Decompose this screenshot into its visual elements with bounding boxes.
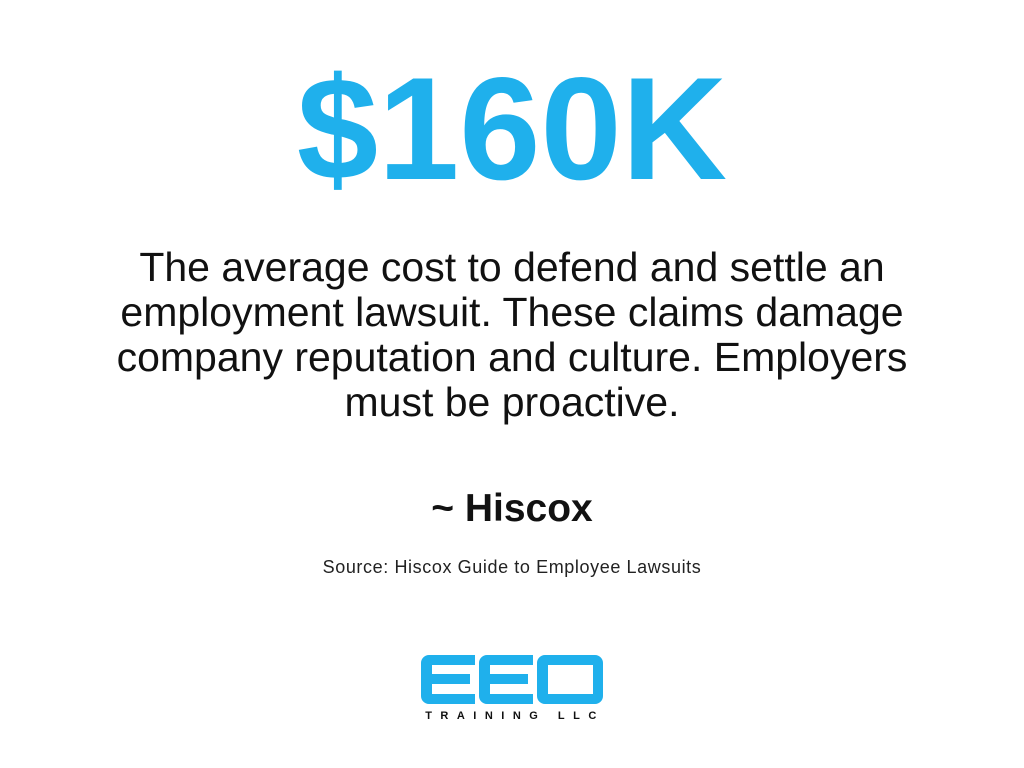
text block: description: employment lawsuit. These claims damage xyxy=(120,289,904,335)
logo: EEO Training LLC xyxy=(421,655,605,722)
text block: description: The average cost to defend and settle an xyxy=(139,244,885,290)
title: big number: $160K xyxy=(297,47,727,210)
text block: description xyxy=(117,244,907,425)
source note: Source: Hiscox Guide to Employee Lawsuits xyxy=(323,557,701,577)
text block: description: company reputation and culture. Employers xyxy=(117,334,907,380)
attribution: ~ Hiscox xyxy=(431,487,593,530)
logo: EEO Training LLC: TRAINING LLC xyxy=(425,710,605,722)
text block: description: must be proactive. xyxy=(344,379,680,425)
